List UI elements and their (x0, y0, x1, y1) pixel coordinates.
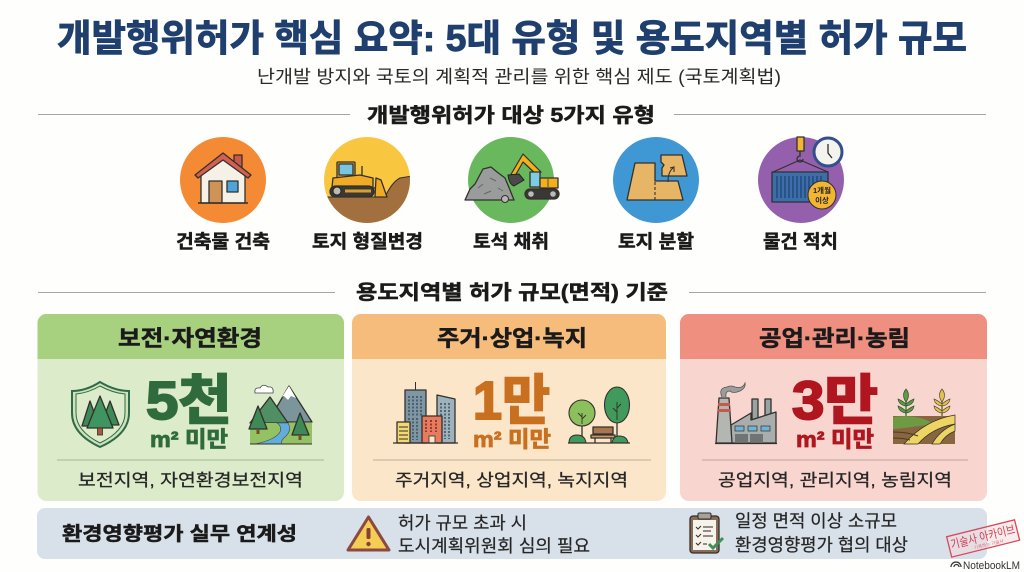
zone list: 보전지역, 자연환경보전지역 (78, 471, 303, 490)
icon: rocks and excavator (465, 137, 559, 223)
stamp watermark: 기록하는 기술사 (973, 537, 1005, 551)
icon: trees and bench (568, 387, 630, 443)
icon: container, clock and badge (758, 137, 844, 223)
zone list: 공업지역, 관리지역, 농림지역 (718, 471, 952, 490)
checklist text line 2: 환경영향평가 협의 대상 (735, 535, 908, 555)
icon: city buildings (393, 382, 458, 443)
checklist text: 일정 면적 이상 소규모 (735, 511, 897, 531)
panel: conservation and natural environment (38, 314, 344, 501)
panel heading: 주거·상업·녹지 (437, 326, 587, 351)
type: land alteration (312, 137, 423, 252)
icon: mountains and river (249, 385, 312, 444)
type: quarrying (465, 137, 559, 252)
type: goods storage (758, 137, 844, 252)
label: 토석 채취 (473, 231, 549, 252)
title: 개발행위허가 핵심 요약: 5대 유형 및 용도지역별 허가 규모 (57, 18, 967, 59)
type: building construction (176, 137, 270, 252)
icon: bulldozer (324, 137, 412, 225)
icon: container, clock and badge: 1개월 (813, 185, 831, 195)
unit: m² 미만 (796, 427, 874, 452)
icon: crops and farm field (893, 389, 955, 444)
icon: house (180, 137, 266, 223)
label: 물건 적치 (763, 231, 838, 252)
warning text: 허가 규모 초과 시 (398, 513, 527, 533)
panel: industrial, management, agriculture (680, 314, 987, 501)
panel heading: 공업·관리·농림 (759, 326, 910, 351)
unit: m² 미만 (473, 427, 551, 452)
section heading: permit area by zone: 용도지역별 허가 규모(면적) 기준 (356, 281, 668, 304)
type: land subdivision (613, 137, 699, 252)
unit: m² 미만 (150, 427, 228, 452)
icon: shield with trees (72, 382, 129, 447)
label: 토지 분할 (618, 231, 694, 252)
icon: factory (715, 383, 777, 444)
icon: container, clock and badge: 이상 (815, 195, 829, 205)
big number: 3만 (792, 371, 878, 431)
label: 건축물 건축 (176, 231, 270, 252)
label: 토지 형질변경 (312, 231, 423, 252)
icon: land parcels (613, 137, 699, 223)
panel heading: 보전·자연환경 (118, 326, 262, 351)
panel: residential, commercial, green (352, 314, 666, 501)
callout heading: 환경영향평가 실무 연계성 (62, 523, 297, 545)
icon: warning triangle (348, 517, 389, 550)
icon: clipboard checklist (690, 513, 723, 553)
NotebookLM logo: NotebookLM (963, 560, 1020, 572)
panel: environmental impact assessment link (37, 508, 987, 559)
big number: 5천 (146, 371, 232, 431)
warning text line 2: 도시계획위원회 심의 필요 (398, 536, 590, 556)
big number: 1만 (473, 371, 550, 431)
section heading: five types: 개발행위허가 대상 5가지 유형 (367, 104, 655, 127)
subtitle: 난개발 방지와 국토의 계획적 관리를 위한 핵심 제도 (국토계획법) (257, 67, 781, 87)
zone list: 주거지역, 상업지역, 녹지지역 (395, 471, 628, 490)
